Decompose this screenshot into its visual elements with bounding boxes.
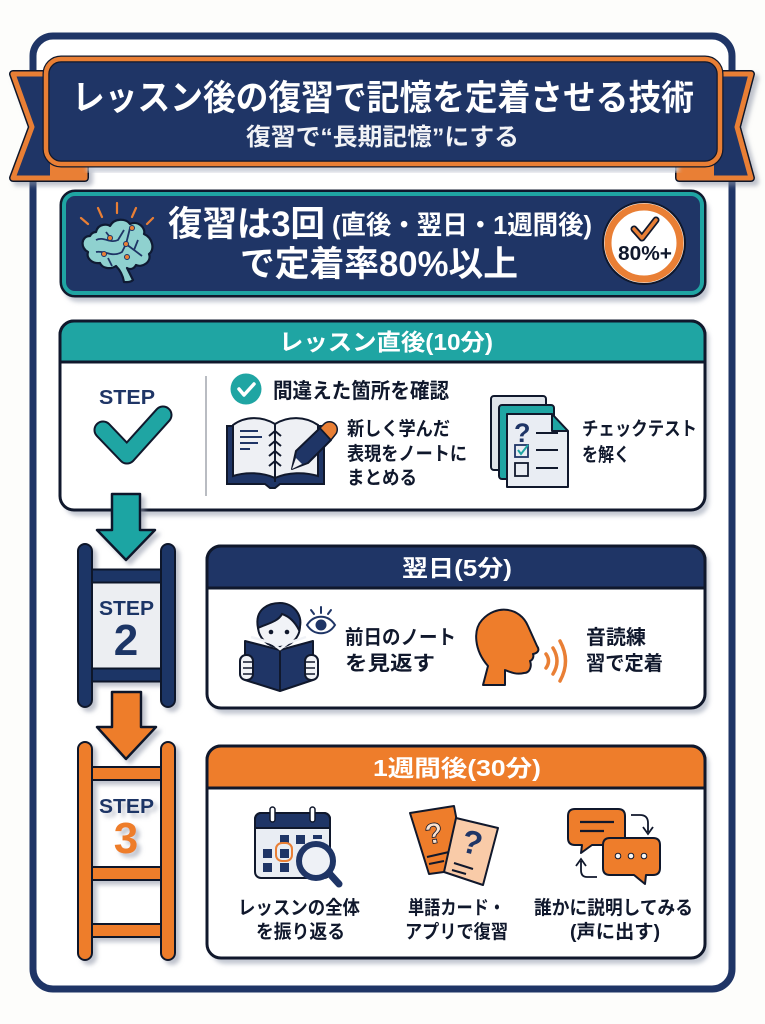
left ribbon fold <box>50 160 85 178</box>
key message panel <box>61 191 709 302</box>
header <box>60 321 705 362</box>
icon: calendar with magnifier <box>255 807 339 884</box>
panel body <box>207 746 705 958</box>
right ribbon tail border <box>679 74 751 178</box>
task text: test: を解く <box>582 444 630 466</box>
task text: cards: 単語カード・ <box>408 897 505 919</box>
panel body <box>207 546 705 708</box>
task text: overview: レッスンの全体 <box>238 897 360 919</box>
main title: レッスン後の復習で記憶を定着させる技術 <box>72 79 694 118</box>
right ribbon fold <box>679 160 714 178</box>
ladder rungs <box>92 767 161 937</box>
step label: STEP <box>99 387 155 409</box>
banner shadow <box>87 166 679 172</box>
step number: 3 <box>114 814 138 863</box>
icon: sound waves <box>546 641 566 681</box>
panel shadow <box>211 750 709 964</box>
icon: flash cards: ? <box>458 822 486 863</box>
header text: レッスン直後(10分) <box>279 329 493 355</box>
panel: step 3 <box>207 746 709 964</box>
panel: step 2 <box>207 546 709 714</box>
icon: person reading <box>240 603 318 691</box>
badge: 80%+ <box>603 202 685 284</box>
divider <box>205 376 207 496</box>
ladder rails <box>78 544 175 707</box>
task text: explain <box>534 897 693 943</box>
task text: explain: 誰かに説明してみる <box>534 897 693 919</box>
task text: overview <box>238 897 360 943</box>
ladder: step 2 <box>78 544 175 707</box>
step number: 2 <box>114 616 138 665</box>
task text: read aloud: 音読練 <box>586 626 646 649</box>
icon: chat bubbles <box>568 809 660 884</box>
icon: flash cards: ? <box>423 817 446 851</box>
arrow: orange down <box>97 692 156 759</box>
headline timing: (直後・翌日・1週間後) <box>332 210 592 240</box>
task text: explain: (声に出す) <box>570 921 660 943</box>
task text: read aloud <box>586 626 663 675</box>
panel shadow <box>64 325 709 516</box>
right ribbon tail <box>679 74 751 178</box>
banner orange border <box>46 59 720 164</box>
task text: test: チェックテスト <box>582 418 697 440</box>
panel shadow <box>64 197 709 302</box>
task text: overview: を振り返る <box>256 921 345 943</box>
title banner <box>13 59 751 178</box>
task text: notes: 新しく学んだ <box>347 417 450 440</box>
task text: cards: アプリで復習 <box>405 921 508 943</box>
icon: big check fill <box>103 415 163 455</box>
icon: notebook and pencil <box>227 418 337 488</box>
header text: 1週間後(30分) <box>373 755 541 781</box>
badge: 80%+: 80%+ <box>618 243 672 265</box>
icon: test sheets <box>491 396 568 487</box>
icon: speaking head <box>476 610 538 685</box>
subtitle: 復習で“長期記憶”にする <box>246 124 519 151</box>
step label: STEP <box>99 598 154 620</box>
icon: test sheets: ? <box>514 418 530 448</box>
headline line 2: で定着率80%以上 <box>240 245 518 284</box>
task text: notes <box>347 417 467 489</box>
ladder panel <box>92 583 161 668</box>
task text: notes: 表現をノートに <box>347 443 467 465</box>
task text: read aloud: 習で定着 <box>586 652 663 675</box>
left ribbon tail <box>13 74 85 178</box>
icon: check circle <box>230 374 262 404</box>
header <box>207 546 705 588</box>
panel body <box>61 191 705 296</box>
icon: big check <box>103 415 163 455</box>
task text: review notes <box>345 626 456 675</box>
panel shadow <box>211 550 709 714</box>
task text: 間違えた箇所を確認 <box>273 380 449 403</box>
ladder rails <box>78 742 175 960</box>
ladder rungs <box>92 570 161 682</box>
left ribbon tail border <box>13 74 85 178</box>
task text: test <box>582 418 697 466</box>
task text: notes: まとめる <box>347 468 417 489</box>
task text: cards <box>405 897 508 943</box>
icon: brain <box>81 203 153 282</box>
task text: review notes: を見返す <box>345 652 435 675</box>
panel: step 1 <box>60 321 709 516</box>
header <box>207 746 705 788</box>
arrow: teal down <box>97 494 155 560</box>
task text: review notes: 前日のノート <box>345 626 456 649</box>
header text: 翌日(5分) <box>402 555 512 581</box>
icon: eye <box>307 607 335 633</box>
panel teal border <box>64 194 702 293</box>
banner body <box>46 59 720 164</box>
headline line 1: 復習は3回 <box>168 205 325 244</box>
icon: flash cards <box>410 806 498 885</box>
panel body <box>60 321 705 510</box>
ladder: step 3 <box>78 742 175 960</box>
step label: STEP <box>99 796 154 818</box>
